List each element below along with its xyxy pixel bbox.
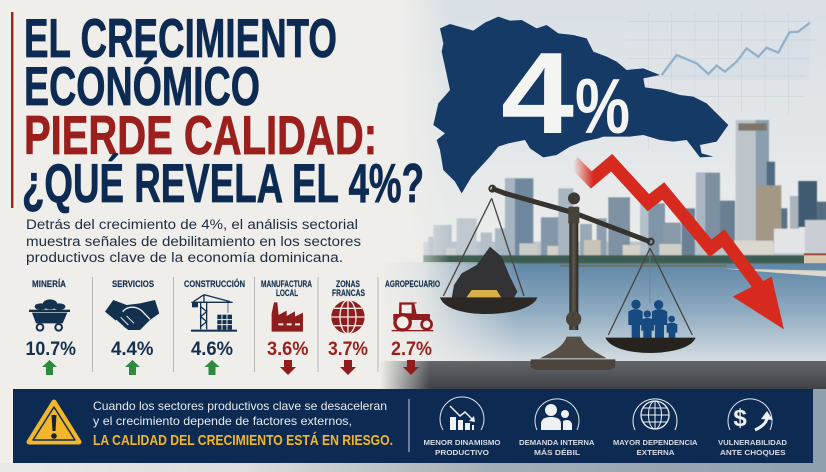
icon: handshake (105, 300, 159, 330)
sector: agropecuario (385, 279, 440, 375)
consequence: demanda interna: DEMANDA INTERNA (519, 438, 595, 447)
banner message: Cuando los sectores productivos clave se desaceleran (93, 399, 387, 413)
city skyline (423, 120, 826, 258)
title: EL CRECIMIENTO (24, 7, 337, 69)
sector: minería: 10.7% (26, 338, 76, 360)
waterfront (423, 253, 826, 277)
title: PIERDE CALIDAD: (24, 104, 377, 166)
icon: factory (272, 302, 303, 332)
consequence: demanda interna: MÁS DÉBIL (534, 448, 580, 457)
4: 4 (501, 28, 574, 158)
sector: zonas francas: FRANCAS (332, 288, 365, 299)
banner message (93, 399, 393, 449)
right margin strip (813, 389, 826, 464)
sector: manufactura local: LOCAL (276, 288, 298, 299)
consequence: menor dinamismo: MENOR DINAMISMO (424, 438, 501, 447)
intro paragraph: productivos clave de la economía dominicana. (26, 250, 343, 265)
consequence: mayor dependencia (613, 399, 698, 457)
percent sign: % (575, 62, 630, 150)
consequence: menor dinamismo (424, 397, 501, 457)
sector: minería (26, 279, 76, 375)
icon: crane and building (191, 295, 237, 332)
sector: zonas francas: ZONAS (336, 279, 360, 290)
sector: construcción: CONSTRUCCIÓN (184, 278, 245, 290)
consequence: vulnerabilidad (718, 399, 788, 457)
icon: dollar with arrow: $ (733, 405, 747, 432)
sector: servicios: 4.4% (111, 338, 154, 360)
intro paragraph: muestra señales de debilitamiento en los sectores (26, 234, 361, 249)
icon: mine cart (29, 299, 70, 331)
sector: construcción (184, 278, 245, 375)
sector: manufactura local (261, 279, 312, 375)
intro paragraph (26, 217, 361, 265)
title (11, 7, 424, 214)
arrow up (125, 360, 140, 375)
icon: warning triangle (29, 402, 79, 442)
consequence: mayor dependencia: EXTERNA (636, 448, 675, 457)
left pan with rock and gold (440, 198, 537, 314)
consequence: vulnerabilidad: VULNERABILIDAD (718, 438, 788, 447)
sector: manufactura local: 3.6% (267, 338, 308, 360)
intro paragraph: Detrás del crecimiento de 4%, el análisis sectorial (26, 217, 358, 232)
table surface (380, 361, 826, 389)
falling red arrow (573, 162, 784, 329)
icon: globe (633, 399, 677, 430)
consequence: menor dinamismo: PRODUCTIVO (435, 448, 489, 457)
arrow down (403, 360, 419, 375)
sector: agropecuario: 2.7% (391, 338, 432, 360)
arrow down (280, 360, 296, 375)
balance scale (440, 186, 696, 370)
arrow up (42, 360, 57, 375)
icon: globe (331, 300, 365, 334)
scale stand (531, 192, 615, 370)
arrow up (204, 360, 220, 375)
title: ¿QUÉ REVELA EL 4%? (22, 152, 424, 214)
title: ECONÓMICO (24, 55, 260, 117)
map of the Dominican Republic with 4% (433, 17, 728, 193)
icon: tractor (392, 302, 433, 331)
banner message: y el crecimiento depende de factores externos, (93, 414, 352, 428)
icon: people (535, 399, 579, 430)
sector: servicios: SERVICIOS (112, 279, 154, 290)
sector: zonas francas (328, 279, 368, 375)
consequence: demanda interna (519, 399, 595, 457)
right pan with family (605, 248, 696, 353)
bottom banner (13, 389, 813, 463)
arrow down (340, 360, 356, 375)
sector: manufactura local: MANUFACTURA (261, 279, 312, 290)
banner message: LA CALIDAD DEL CRECIMIENTO ESTÁ EN RIESGO. (93, 432, 393, 449)
left fade of the photo (380, 0, 520, 362)
icon: falling bars (440, 397, 484, 430)
sector: construcción: 4.6% (191, 338, 233, 360)
sector: agropecuario: AGROPECUARIO (385, 279, 440, 290)
consequence: vulnerabilidad: ANTE CHOQUES (720, 448, 786, 457)
sector dividers (92, 277, 378, 372)
sector: servicios (105, 279, 159, 375)
bottom ground strip (0, 463, 826, 472)
scale beam (489, 186, 654, 245)
consequence: mayor dependencia: MAYOR DEPENDENCIA (613, 438, 698, 447)
sector: minería: MINERÍA (32, 279, 66, 290)
sector: zonas francas: 3.7% (328, 338, 368, 360)
rising chart line (627, 13, 817, 150)
